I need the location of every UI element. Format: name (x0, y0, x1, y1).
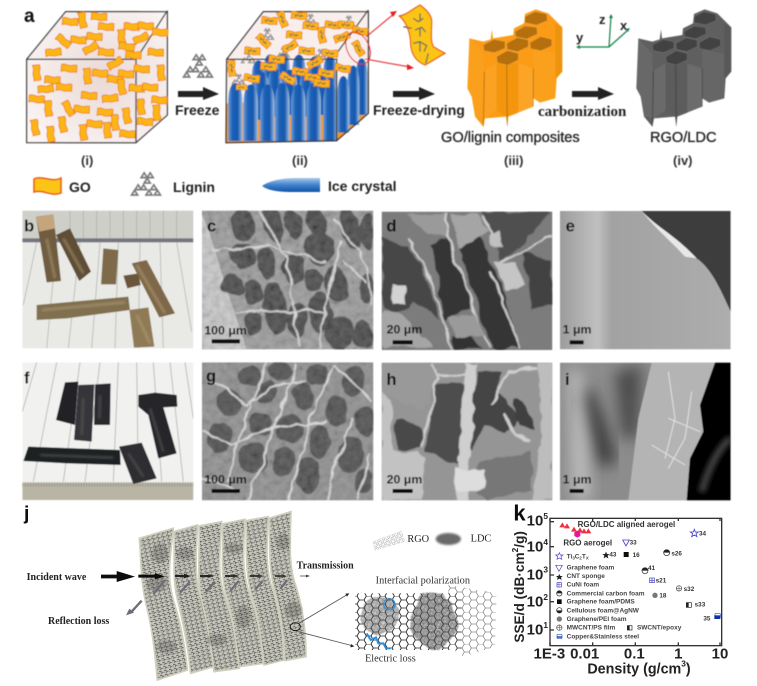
y axis title: SSE/d (dB·cm (512, 552, 527, 643)
right column letters and scale bars (386, 217, 591, 493)
x tick labels: 1E-3 (534, 646, 565, 663)
panel h: SEM 20 um (382, 363, 552, 502)
label a: a (24, 6, 35, 27)
legend entries (556, 553, 682, 640)
axes xyz: z (599, 12, 606, 27)
y tick labels: 4 (543, 537, 548, 547)
y tick labels: 1 (543, 620, 548, 630)
y tick labels: 10 (527, 622, 543, 639)
y axis title: 2 (510, 547, 520, 552)
c scale: 100 μm (204, 323, 247, 337)
right column letters and scale bars: 1 μm (563, 472, 591, 486)
right column letters and scale bars: 20 μm (387, 322, 422, 336)
incident wave arrows (101, 571, 310, 582)
label: Freeze-drying: Freeze-drying (373, 102, 465, 118)
x tick labels: 0.1 (624, 646, 645, 663)
electric loss label: Electric loss (365, 653, 416, 664)
point labels: 34 (699, 530, 707, 537)
wave labels: Transmission (297, 560, 354, 571)
interfacial polarization label: Interfacial polarization (376, 576, 470, 587)
axes xyz: y (576, 30, 584, 45)
legend entries: Cellulous foam@AgNW (567, 607, 640, 614)
x tick labels: 1 (674, 646, 683, 663)
legend entries: MWCNT/PS film (567, 625, 616, 632)
legend entries: CuNi foam (567, 581, 599, 588)
legend entries: Graphene foam (567, 564, 614, 571)
axes xyz: x (620, 18, 628, 33)
y tick labels: 2 (543, 592, 548, 602)
honeycomb iv: RGO/LDC (636, 9, 731, 127)
cube i: GO dispersion (27, 11, 168, 144)
arrow: carbonization (572, 87, 614, 100)
point labels: 43 (609, 552, 617, 559)
label: Freeze: Freeze (175, 102, 220, 118)
label j: j (23, 503, 29, 524)
RGO and LDC legend (373, 531, 491, 551)
y axis title: /g) (512, 531, 527, 548)
legend entries: CNT sponge (567, 573, 605, 580)
left column panel letters and scale bars: g (206, 367, 216, 386)
g scale (204, 472, 247, 493)
panel c: SEM 100 um (202, 207, 373, 350)
axes xyz (576, 12, 630, 49)
plot frame (550, 518, 722, 646)
stage labels: (ii) (292, 153, 308, 168)
stage labels: (i) (81, 153, 93, 168)
compound labels: RGO/LDC (650, 130, 716, 146)
series annotation labels: RGO/LDC aligned aerogel (578, 520, 675, 529)
point labels: 41 (648, 565, 656, 572)
series annotation labels (563, 520, 675, 547)
arrow: freeze (178, 87, 219, 100)
legend entries: 2 (579, 556, 582, 561)
c scale (204, 323, 247, 343)
label k: k (513, 501, 526, 526)
legend entries: Copper&Stainless steel (567, 633, 639, 640)
legend (34, 173, 396, 195)
panel i: SEM 1 um (560, 363, 731, 500)
wave labels: Incident wave (27, 572, 87, 583)
legend: Lignin (173, 179, 215, 195)
point labels (609, 530, 711, 623)
legend: GO (69, 179, 91, 195)
x axis title: Density (g/cm (587, 661, 681, 677)
point labels: s21 (656, 577, 667, 584)
y tick labels (527, 511, 548, 639)
y tick labels: 10 (527, 594, 543, 611)
stage labels: (iv) (673, 153, 692, 168)
panel b: photo of GO/lignin aerogels (22, 211, 193, 348)
y tick labels: 10 (527, 539, 543, 556)
panel d: SEM 20 um (382, 212, 552, 350)
x axis title: 3 (681, 659, 686, 669)
point labels: s33 (695, 602, 706, 609)
y tick labels: 3 (543, 565, 548, 575)
legend entries: Ti (567, 553, 572, 560)
panel e: SEM 1 um (560, 211, 731, 349)
dark LDC patches on sheets (147, 533, 302, 653)
legend entries: C (575, 553, 580, 560)
reflected grey arrows (126, 580, 287, 615)
lignin molecule (184, 55, 212, 77)
graphene lattice with LDC (355, 585, 497, 657)
legend entries: Graphene/PEI foam (567, 616, 627, 623)
right column letters and scale bars: 1 μm (563, 322, 591, 336)
point labels: 16 (633, 552, 640, 559)
y tick labels: 10 (527, 566, 543, 583)
six layered sheets (139, 512, 306, 680)
stage labels: (iii) (504, 153, 524, 168)
legend: Ice crystal (328, 178, 396, 194)
stage labels (81, 153, 692, 168)
series annotation labels: RGO aerogel (563, 538, 612, 547)
honeycomb iii: GO/lignin composite (467, 9, 562, 127)
point labels: s26 (671, 551, 682, 558)
compound labels (441, 130, 716, 146)
panel g: SEM 100 um (202, 362, 373, 500)
legend entries: SWCNT/epoxy (637, 625, 682, 632)
panel k: SSE/d vs density scatter chart (510, 501, 728, 677)
x tick labels: 10 (712, 646, 728, 663)
point labels: 18 (659, 593, 667, 600)
legend entries: Graphene foam/PDMS (567, 599, 635, 606)
right column letters and scale bars: i (565, 370, 570, 389)
legend entries: X (586, 556, 589, 561)
y tick labels: 10 (527, 513, 543, 530)
right column letters and scale bars: 20 μm (387, 472, 422, 486)
left column panel letters and scale bars: b (24, 217, 34, 236)
zoom arrows and circle (290, 593, 354, 647)
right column letters and scale bars: h (386, 370, 397, 389)
data points (559, 522, 720, 619)
right column letters and scale bars: d (386, 217, 397, 236)
red zoom circle and arrows (341, 11, 414, 70)
label: carbonization: carbonization (538, 104, 627, 120)
point labels: 33 (630, 540, 637, 547)
arrow: freeze-drying (393, 87, 435, 100)
x tick labels (534, 646, 728, 663)
x tick labels: 0.01 (570, 646, 599, 663)
legend entries: T (582, 553, 586, 560)
g scale: 100 μm (204, 472, 247, 486)
magnified GO sheet with lignin (399, 5, 445, 65)
wave labels (27, 560, 354, 627)
cube ii: ice crystals growing (226, 10, 369, 143)
legend entries: Commercial carbon foam (567, 590, 645, 597)
wave labels: Reflection loss (48, 616, 109, 627)
panel j: wave attenuation schematic (23, 503, 497, 680)
left column panel letters and scale bars: f (24, 368, 30, 387)
left column panel letters and scale bars: c (207, 217, 216, 236)
y tick labels: 5 (543, 511, 548, 521)
panel a: freeze-casting schematic (24, 5, 731, 195)
x axis title: ) (686, 661, 691, 677)
point labels: s32 (684, 586, 695, 593)
compound labels: GO/lignin composites (441, 130, 580, 146)
RGO and LDC legend: LDC (471, 534, 491, 545)
right column letters and scale bars: e (566, 217, 575, 236)
photo panels and SEM (22, 207, 731, 502)
panel f: photo of carbonized aerogels (22, 362, 193, 500)
point labels: 35 (703, 616, 711, 623)
left column panel letters and scale bars (24, 217, 247, 493)
RGO and LDC legend: RGO (407, 534, 430, 545)
legend entries: 3 (572, 556, 575, 561)
